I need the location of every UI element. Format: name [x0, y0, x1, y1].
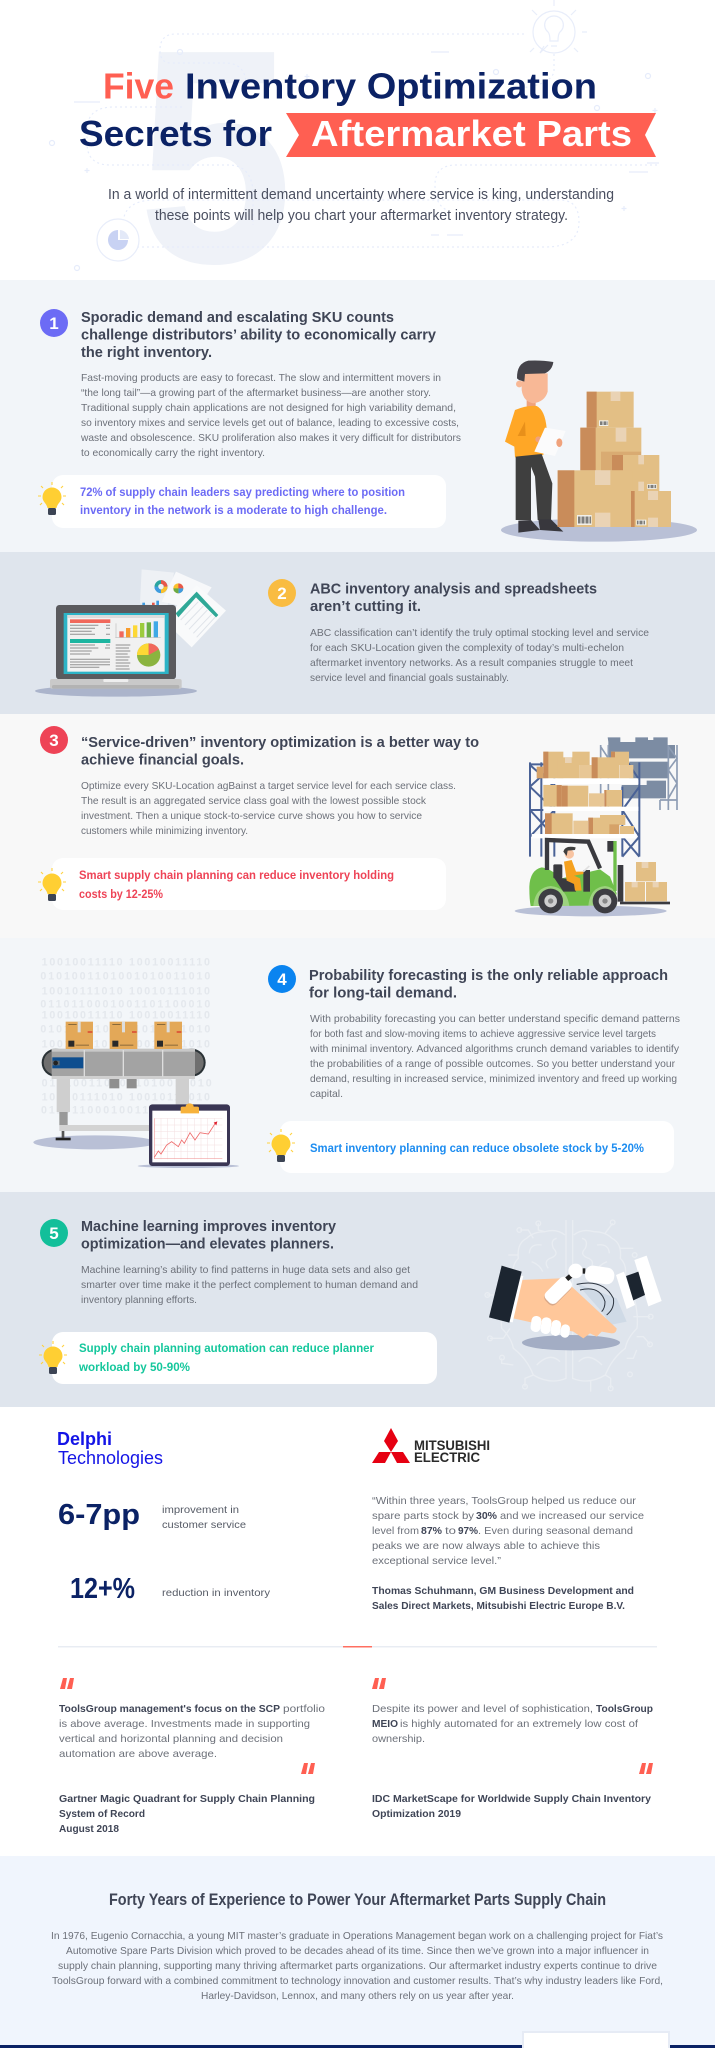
binary background — [40, 956, 212, 1116]
number badge 5: 5 — [49, 1224, 59, 1243]
heading 3: “Service-driven” inventory optimization is a better way to — [81, 734, 479, 751]
callout 4 — [267, 1121, 674, 1173]
callout 1: inventory in the network is a moderate to high challenge. — [80, 503, 387, 517]
icon: light bulb bubble — [530, 0, 587, 53]
title: Aftermarket Parts — [311, 113, 632, 154]
body text 2: aftermarket inventory networks. As a result companies struggle to meet — [310, 657, 633, 669]
panel: secret 3 — [0, 714, 715, 938]
customer quote: 87% — [421, 1525, 443, 1537]
body text 2: service level and financial goals sustainably. — [310, 672, 509, 684]
body text 3: The result is an aggregated service class goal with the lowest possible stock — [81, 795, 427, 807]
customer quote: level from — [372, 1525, 419, 1537]
callout 3 — [38, 858, 446, 910]
analyst quote: Gartner: System of Record — [59, 1808, 145, 1820]
customer quote: 97% — [458, 1525, 479, 1537]
callout 5: workload by 50-90% — [78, 1360, 190, 1374]
body text 1: to economically carry the right inventory. — [81, 447, 265, 459]
heading 1: the right inventory. — [81, 344, 212, 361]
heading 1: challenge distributors’ ability to economically carry — [81, 326, 437, 344]
illustration: man with boxes — [501, 360, 697, 542]
analyst quote: Gartner: portfolio — [283, 1703, 325, 1715]
customer quote: . Even during seasonal demand — [478, 1525, 633, 1537]
number badge 2 — [268, 579, 296, 607]
logo: Delphi Technologies: Technologies — [58, 1448, 163, 1468]
title: Inventory Optimization — [185, 66, 597, 106]
body text 5: inventory planning efforts. — [81, 1294, 197, 1306]
illustration: laptop and reports — [35, 569, 226, 697]
company history text — [51, 1930, 663, 2002]
heading 2: aren’t cutting it. — [310, 598, 421, 615]
icon: opening quote mark — [372, 1678, 386, 1689]
stat: customer service: improvement in — [162, 1504, 239, 1516]
body text 5: Machine learning’s ability to find patterns in huge data sets and also get — [81, 1264, 410, 1276]
body text 2: ABC classification can’t identify the truly optimal stocking level and service — [310, 627, 649, 639]
title: Five — [103, 66, 174, 106]
ribbon — [286, 113, 656, 157]
binary background: 0110110001001101100010 — [41, 1104, 211, 1116]
quote attribution: Sales Direct Markets, Mitsubishi Electric Europe B.V. — [372, 1600, 625, 1612]
binary background: 0110110001001101100010 — [40, 998, 210, 1010]
heading 2: ABC inventory analysis and spreadsheets — [310, 580, 597, 598]
body text 4: capital. — [310, 1088, 343, 1100]
analyst quote: Gartner: is above average. Investments made in supporting — [59, 1718, 310, 1730]
analyst quote: Gartner: automation are above average. — [59, 1748, 217, 1760]
panel: secret 1 — [0, 280, 715, 552]
body text 4: for both fast and slow-moving items to achieve aggressive service level targets — [310, 1028, 656, 1040]
panel: secret 5 — [0, 1192, 715, 1407]
icon: bulb — [39, 1341, 67, 1374]
number badge 2: 2 — [277, 584, 287, 603]
analyst quote: IDC: MEIO — [372, 1718, 398, 1730]
icon: bulb — [267, 1129, 295, 1162]
icon: opening quote mark — [60, 1678, 74, 1689]
company history text: Automotive Spare Parts Division which proved to be decades ahead of its time. Since then we’ve grown into a major influencer in — [66, 1945, 649, 1957]
analyst quote: Gartner: Gartner Magic Quadrant for Supply Chain Planning — [59, 1793, 315, 1805]
logo: Delphi Technologies: Delphi — [57, 1429, 112, 1449]
company history text: supply chain planning, supporting many thriving aftermarket parts organizations. Our aftermarket industry experts continue to drive — [58, 1960, 657, 1972]
binary background: 10010111010 10010111010 — [42, 1038, 210, 1050]
customer quote: to — [445, 1525, 456, 1537]
illustration: handshake and circuit brain — [485, 1220, 662, 1392]
binary background: 10010011110 10010011110 — [42, 1010, 210, 1022]
analyst quote: IDC: Despite its power and level of sophistication, — [372, 1703, 593, 1715]
customer quote: and we increased our service — [500, 1510, 644, 1522]
icon: bulb — [38, 482, 66, 515]
heading 3 — [81, 734, 479, 768]
body text 3: Optimize every SKU-Location agBainst a target service level for each service class. — [81, 780, 456, 792]
header section — [50, 0, 659, 327]
logo: Mitsubishi Electric — [372, 1428, 490, 1465]
title — [79, 66, 656, 157]
body text 1: waste and obsolescence. SKU proliferation also makes it very difficult for distributors — [80, 432, 461, 444]
panel: secret 4 — [0, 938, 715, 1192]
heading 5: Machine learning improves inventory — [81, 1218, 337, 1235]
callout 1 — [38, 475, 446, 528]
analyst quote: IDC: is highly automated for an extremely low cost of — [400, 1718, 638, 1730]
customer quote: peaks we are now always able to achieve this — [372, 1540, 600, 1552]
heading 3: achieve financial goals. — [81, 752, 244, 768]
analyst quote: Gartner: vertical and horizontal planning and decision — [59, 1733, 283, 1745]
heading 4: Probability forecasting is the only reliable approach — [309, 967, 668, 984]
body text 3 — [81, 780, 456, 837]
number badge 3: 3 — [49, 731, 59, 750]
panel: customer results — [57, 1428, 657, 1648]
stat: inventory reduction: reduction in inventory — [162, 1587, 271, 1599]
customer quote: 30% — [476, 1510, 498, 1522]
binary background: 10010111010 10010111010 — [42, 985, 210, 997]
heading 1: Sporadic demand and escalating SKU counts — [81, 309, 394, 326]
stat: customer service: 6-7pp — [58, 1499, 140, 1531]
intro text: In a world of intermittent demand uncertainty where service is king, understanding — [108, 187, 614, 203]
intro text — [108, 187, 614, 224]
stat: inventory reduction — [70, 1573, 271, 1605]
quote attribution: Thomas Schuhmann, GM Business Development and — [372, 1585, 634, 1597]
heading 4: for long-tail demand. — [309, 984, 457, 1002]
title: Secrets for — [79, 113, 272, 154]
analyst quote: Gartner: ToolsGroup management's focus on the SCP — [59, 1703, 280, 1715]
binary background: 0101001101001010011010 — [40, 970, 210, 982]
heading 4 — [309, 967, 668, 1002]
logo: Mitsubishi Electric: MITSUBISHI — [414, 1438, 490, 1453]
callout 5: Supply chain planning automation can reduce planner — [79, 1341, 374, 1355]
stat: inventory reduction: 12+% — [70, 1573, 135, 1605]
quote attribution — [372, 1585, 634, 1612]
binary background: 10010111010 10010111010 — [42, 1092, 210, 1104]
company history text: Harley-Davidson, Lennox, and many others rely on us year after year. — [201, 1990, 514, 2002]
body text 5 — [81, 1264, 418, 1306]
heading 5 — [81, 1218, 337, 1252]
logo: Mitsubishi Electric: ELECTRIC — [414, 1450, 480, 1465]
customer quote: exceptional service level.” — [372, 1555, 502, 1567]
body text 4: with minimal inventory. Advanced algorithms crunch demand variables to identify — [309, 1043, 680, 1055]
callout 5 — [39, 1332, 437, 1384]
section heading: Forty Years of Experience to Power Your Aftermarket Parts Supply Chain — [109, 1891, 606, 1909]
illustration: forklift and racks — [515, 737, 677, 916]
number badge 1: 1 — [49, 314, 59, 333]
callout 3: Smart supply chain planning can reduce inventory holding — [79, 868, 394, 882]
binary background: 10010011110 10010011110 — [42, 956, 210, 968]
stat: customer service — [58, 1499, 246, 1531]
number badge 5 — [40, 1219, 68, 1247]
analyst quote: IDC: ownership. — [372, 1733, 425, 1745]
body text 2: for each SKU-Location given the complexity of today’s multi-echelon — [310, 642, 624, 654]
stat: customer service: customer service — [162, 1519, 246, 1531]
panel: secret 2 — [0, 552, 715, 714]
body text 4 — [309, 1013, 680, 1100]
company history text: In 1976, Eugenio Cornacchia, a young MIT master’s graduate in Operations Management began work on a challenging project for Fiat’s — [51, 1930, 663, 1942]
body text 1: so inventory mixes and service levels get out of balance, leading to excessive costs, — [81, 417, 459, 429]
analyst quote: IDC — [372, 1678, 653, 1820]
intro text: these points will help you chart your aftermarket inventory strategy. — [155, 208, 568, 224]
callout 3: costs by 12-25% — [79, 887, 163, 901]
heading 1 — [81, 309, 437, 361]
body text 4: With probability forecasting you can better understand specific demand patterns — [310, 1013, 680, 1025]
panel: forty years of experience — [0, 1856, 715, 2048]
number badge 4: 4 — [277, 970, 287, 989]
company history text: ToolsGroup forward with a combined commitment to technology innovation and customer results. That’s why industry leaders like Ford, — [52, 1975, 663, 1987]
analyst quote: Gartner — [59, 1678, 325, 1835]
analyst quote: IDC: ToolsGroup — [596, 1703, 653, 1715]
footer bar — [0, 2031, 715, 2048]
body text 1: Fast-moving products are easy to forecast. The slow and intermittent movers in — [81, 372, 441, 384]
analyst quote: IDC: IDC MarketScape for Worldwide Supply Chain Inventory — [372, 1793, 651, 1805]
body text 1: “the long tail”—a growing part of the aftermarket business—are another story. — [81, 387, 431, 399]
body text 5: smarter over time make it the perfect complement to human demand and — [81, 1279, 418, 1291]
heading 2 — [310, 580, 597, 615]
binary background: 0101001101001010011010 — [42, 1078, 212, 1090]
number badge 1 — [40, 309, 68, 337]
callout 4: Smart inventory planning can reduce obsolete stock by 5-20% — [310, 1141, 644, 1155]
body text 4: demand, resulting in increased service, minimized inventory and freed up working — [310, 1073, 677, 1085]
body text 1: Traditional supply chain applications are not designed for high variability demand, — [81, 402, 456, 414]
analyst quote: Gartner: August 2018 — [59, 1823, 119, 1835]
icon: pie chart bubble — [97, 219, 139, 261]
logo: Delphi Technologies — [57, 1429, 163, 1468]
body text 2 — [310, 627, 649, 684]
customer quote: spare parts stock by — [372, 1510, 475, 1522]
body text 3: investment. Then a unique stock-to-service curve shows you how to service — [81, 810, 422, 822]
illustration: conveyor belt and chart — [33, 956, 239, 1168]
heading 5: optimization—and elevates planners. — [81, 1236, 334, 1252]
callout 1: 72% of supply chain leaders say predicting where to position — [80, 485, 405, 499]
body text 4: the probabilities of a range of possible outcomes. So you better understand your — [310, 1058, 675, 1070]
number badge 3 — [40, 726, 68, 754]
number badge 4 — [268, 965, 296, 993]
body text 3: customers while minimizing inventory. — [81, 825, 248, 837]
body text 1 — [80, 372, 461, 459]
customer quote: “Within three years, ToolsGroup helped us reduce our — [372, 1495, 637, 1507]
analyst quote: IDC: Optimization 2019 — [372, 1808, 461, 1820]
binary background: 0101001101001010011010 — [40, 1024, 210, 1036]
panel: analyst quotes — [59, 1678, 653, 1835]
icon: bulb — [38, 868, 66, 901]
customer quote — [372, 1495, 644, 1567]
